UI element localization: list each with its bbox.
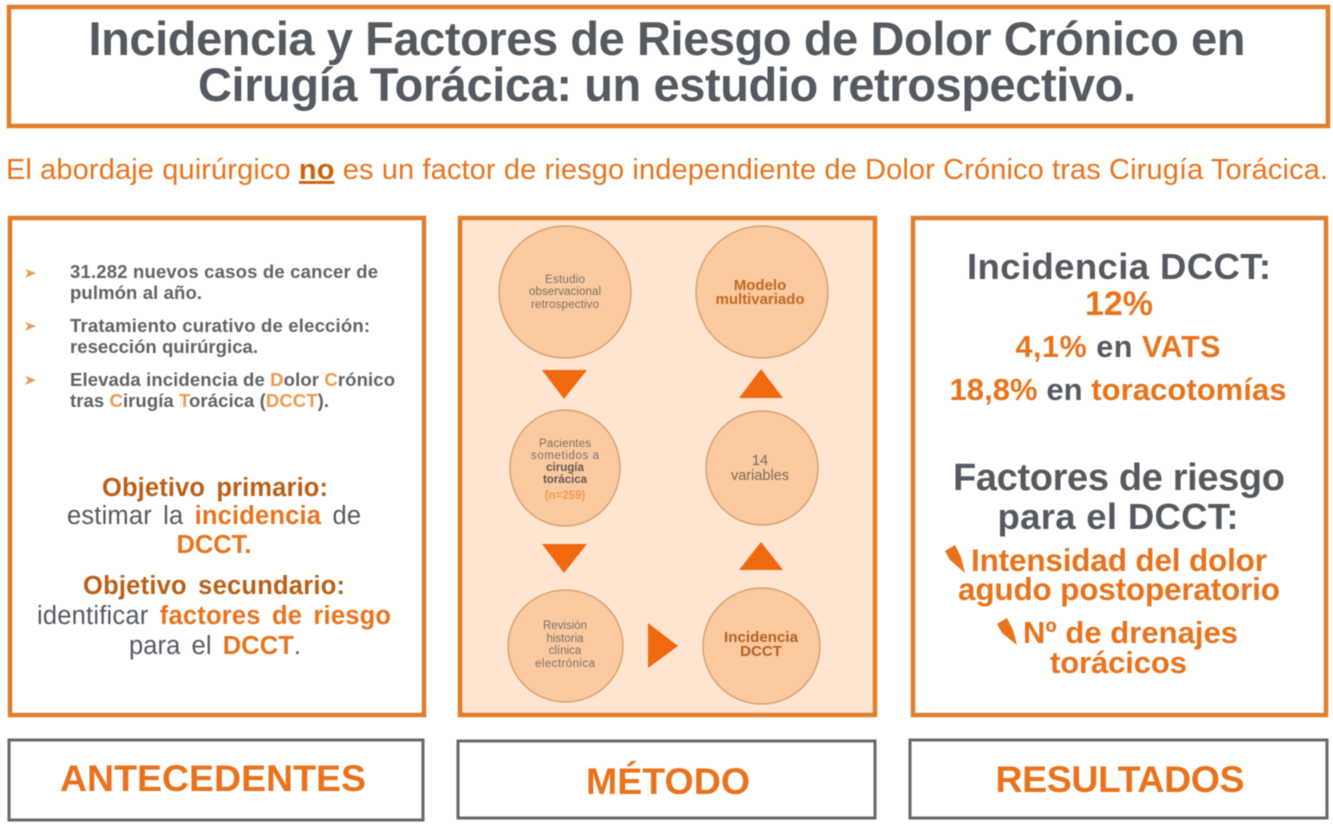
step: estudio observacional: observacional <box>529 286 601 298</box>
title: Incidencia y Factores de Riesgo de Dolor Crónico en <box>88 12 1246 65</box>
step: modelo multivariado: Modelo <box>734 277 786 294</box>
risk factors heading <box>953 457 1285 537</box>
incidence results: 18,8% en toracotomías <box>950 372 1286 407</box>
background bullet list: Elevada incidencia de Dolor Crónico <box>70 369 395 390</box>
subtitle: key message: El abordaje quirúrgico no es un factor de riesgo independiente de Dolor Crónico tras Cirugía Torácica. <box>6 154 1328 186</box>
label: metodo <box>458 741 875 818</box>
icon: bolt <box>945 545 965 573</box>
background bullet list: 31.282 nuevos casos de cancer de <box>70 261 378 282</box>
risk factor: pain intensity: agudo postoperatorio <box>958 571 1280 607</box>
background bullet list: resección quirúrgica. <box>70 336 258 357</box>
arrow: up 1 <box>739 369 783 398</box>
background bullet list: Tratamiento curativo de elección: <box>70 315 370 336</box>
title <box>9 7 1328 126</box>
label: resultados <box>910 740 1327 818</box>
arrow: right <box>648 623 678 668</box>
label: antecedentes <box>9 740 423 820</box>
background bullet list: pulmón al año. <box>70 282 202 303</box>
secondary objective: para el DCCT. <box>129 632 301 660</box>
step: incidencia DCCT: Incidencia <box>724 629 799 646</box>
secondary objective: identificar factores de riesgo <box>37 602 391 630</box>
risk factors heading: para el DCCT: <box>998 496 1238 537</box>
step: revision historia: electrónica <box>535 658 596 670</box>
panel: resultados <box>913 218 1326 715</box>
label: metodo: MÉTODO <box>586 760 750 802</box>
step: incidencia DCCT: DCCT <box>740 643 782 660</box>
risk factor: pain intensity <box>945 542 1280 607</box>
step: pacientes: cirugía <box>546 462 584 474</box>
title: Cirugía Torácica: un estudio retrospectivo. <box>198 58 1136 111</box>
label: antecedentes: ANTECEDENTES <box>60 757 366 799</box>
step: pacientes: torácica <box>543 474 588 486</box>
step: pacientes: Pacientes <box>539 438 591 450</box>
step: incidencia DCCT <box>703 588 820 704</box>
step: revision historia: Revisión <box>543 620 587 632</box>
primary objective: estimar la incidencia de <box>67 502 361 530</box>
step: pacientes: (n=259) <box>545 490 585 502</box>
background bullet list <box>25 261 395 411</box>
step: pacientes <box>510 410 620 526</box>
step: revision historia: historia <box>546 633 584 645</box>
step: modelo multivariado: multivariado <box>716 291 804 308</box>
step: 14 variables: 14 <box>752 453 768 469</box>
step: 14 variables: variables <box>731 468 789 484</box>
risk factor: drains <box>997 615 1238 680</box>
primary objective: DCCT. <box>176 531 252 559</box>
arrow: up 2 <box>739 542 783 570</box>
primary objective <box>67 474 361 559</box>
risk factor: pain intensity: Intensidad del dolor <box>971 542 1267 578</box>
step: estudio observacional: retrospectivo <box>531 299 599 311</box>
arrow: down 2 <box>542 544 587 573</box>
step: estudio observacional <box>499 226 631 358</box>
step: 14 variables <box>706 411 818 525</box>
step: modelo multivariado <box>696 226 828 358</box>
icon: bolt <box>997 618 1017 645</box>
step: revision historia: clínica <box>549 645 582 657</box>
risk factor: drains: Nº de drenajes <box>1023 615 1238 650</box>
incidence results: 12% <box>1085 285 1153 323</box>
panel: metodo <box>460 218 875 715</box>
panel: antecedentes <box>10 218 424 715</box>
secondary objective <box>37 572 391 660</box>
arrow: down 1 <box>542 370 587 399</box>
step: pacientes: sometidos a <box>531 450 600 462</box>
secondary objective: Objetivo secundario: <box>83 572 345 600</box>
incidence results: Incidencia DCCT: <box>967 246 1271 287</box>
risk factor: drains: torácicos <box>1050 645 1187 680</box>
background bullet list: tras Cirugía Torácica (DCCT). <box>70 390 329 411</box>
incidence results: 4,1% en VATS <box>1016 330 1220 364</box>
label: resultados: RESULTADOS <box>996 758 1244 800</box>
incidence results <box>950 246 1286 407</box>
primary objective: Objetivo primario: <box>102 474 328 502</box>
step: estudio observacional: Estudio <box>545 274 585 286</box>
risk factors heading: Factores de riesgo <box>953 457 1285 499</box>
step: revision historia <box>508 590 623 702</box>
